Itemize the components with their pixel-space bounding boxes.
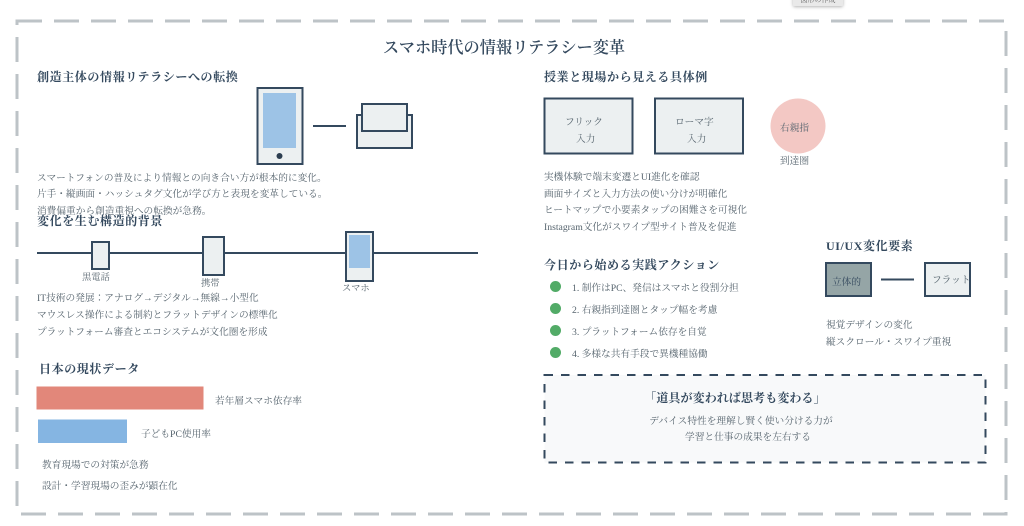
card: romaji input: ローマ字 <box>675 115 714 128</box>
heading: UI/UX change: UI/UX変化要素 <box>826 238 914 253</box>
bar chart: 子どもPC使用率 <box>141 427 211 440</box>
action 2: 2. 右親指到達圏とタップ幅を考慮 <box>572 303 718 316</box>
callout text: 学習と仕事の成果を左右する <box>685 430 811 443</box>
icon: smartphone on timeline <box>342 232 373 294</box>
panel: concrete examples <box>544 69 826 233</box>
icon: feature phone <box>201 237 224 289</box>
panel: UI/UX change <box>826 238 971 348</box>
heading: structural background: 変化を生む構造的背景 <box>37 213 163 228</box>
text: concrete examples body: 画面サイズと入力方法の使い分けが明確化 <box>544 187 728 200</box>
icon: feature phone: 携帯 <box>201 277 220 289</box>
card: romaji input <box>655 98 743 154</box>
text: creator literacy body <box>37 171 327 217</box>
text: structural background body: IT技術の発展：アナログ→デジタル→無線→小型化 <box>37 291 259 304</box>
icon: smartphone <box>258 88 302 164</box>
panel: structural background <box>37 213 478 338</box>
timeline axis <box>37 252 478 254</box>
panel: Japan data <box>36 361 302 492</box>
connector line <box>881 278 914 280</box>
text: Japan data notes: 教育現場での対策が急務 <box>42 458 149 471</box>
text: concrete examples body: Instagram文化がスワイプ型サイト普及を促進 <box>544 220 737 233</box>
text: Japan data notes: 設計・学習現場の歪みが顕在化 <box>42 479 178 492</box>
top tooltip chip <box>793 0 843 6</box>
panel: action list <box>544 257 739 360</box>
card: flick input <box>544 98 632 154</box>
callout text: デバイス特性を理解し賢く使い分ける力が <box>649 414 833 427</box>
text: UI/UX body <box>826 318 951 348</box>
text: UI/UX body: 視覚デザインの変化 <box>826 318 913 331</box>
icon: right thumb reach circle: 右親指 <box>780 121 809 134</box>
panel: creator literacy <box>37 69 412 217</box>
action 3: 3. プラットフォーム依存を自覚 <box>572 325 707 338</box>
icon: landline phone <box>82 242 110 283</box>
text: creator literacy body: 消費偏重から創造重視への転換が急務。 <box>37 204 211 217</box>
action 4: 4. 多様な共有手段で異機種協働 <box>572 347 708 360</box>
title: スマホ時代の情報リテラシー変革 <box>383 38 625 57</box>
heading: action list: 今日から始める実践アクション <box>544 257 720 272</box>
icon: right thumb reach circle: 到達圏 <box>780 154 809 167</box>
box: skeuomorphic <box>826 263 871 296</box>
callout heading: 「道具が変われば思考も変わる」 <box>644 390 826 405</box>
connector line <box>313 125 346 127</box>
heading: Japan data: 日本の現状データ <box>39 361 140 376</box>
text: structural background body: プラットフォーム審査とエコシステムが文化圏を形成 <box>37 325 268 338</box>
text: concrete examples body <box>544 170 747 233</box>
heading: creator literacy: 創造主体の情報リテラシーへの転換 <box>37 69 238 84</box>
icon: landline phone: 黒電話 <box>82 272 110 283</box>
callout <box>544 375 986 462</box>
text: structural background body: マウスレス操作による制約とフラットデザインの標準化 <box>37 308 278 321</box>
card: flick input: 入力 <box>576 132 595 145</box>
bar chart <box>36 386 302 443</box>
callout text <box>649 414 833 443</box>
card: flick input: フリック <box>565 116 603 128</box>
text: creator literacy body: 片手・縦画面・ハッシュタグ文化が学び方と表現を変革している。 <box>37 187 327 200</box>
text: concrete examples body: ヒートマップで小要素タップの困難さを可視化 <box>544 203 747 216</box>
text: creator literacy body: スマートフォンの普及により情報との向き合い方が根本的に変化。 <box>37 171 327 184</box>
bar chart: 若年層スマホ依存率 <box>215 394 302 407</box>
icon: stacked cards <box>357 104 412 148</box>
icon: right thumb reach circle <box>770 98 826 167</box>
text: Japan data notes <box>42 458 178 492</box>
action 1: 1. 制作はPC、発信はスマホと役割分担 <box>572 281 739 294</box>
text: UI/UX body: 縦スクロール・スワイプ重視 <box>826 335 951 348</box>
card: romaji input: 入力 <box>687 132 706 145</box>
box: flat: フラット <box>932 274 971 286</box>
text: structural background body <box>37 291 278 338</box>
box: skeuomorphic: 立体的 <box>832 275 861 288</box>
heading: concrete examples: 授業と現場から見える具体例 <box>544 69 708 84</box>
box: flat <box>925 263 971 296</box>
text: concrete examples body: 実機体験で端末変遷とUI進化を確認 <box>544 170 701 183</box>
icon: smartphone on timeline: スマホ <box>342 284 370 294</box>
